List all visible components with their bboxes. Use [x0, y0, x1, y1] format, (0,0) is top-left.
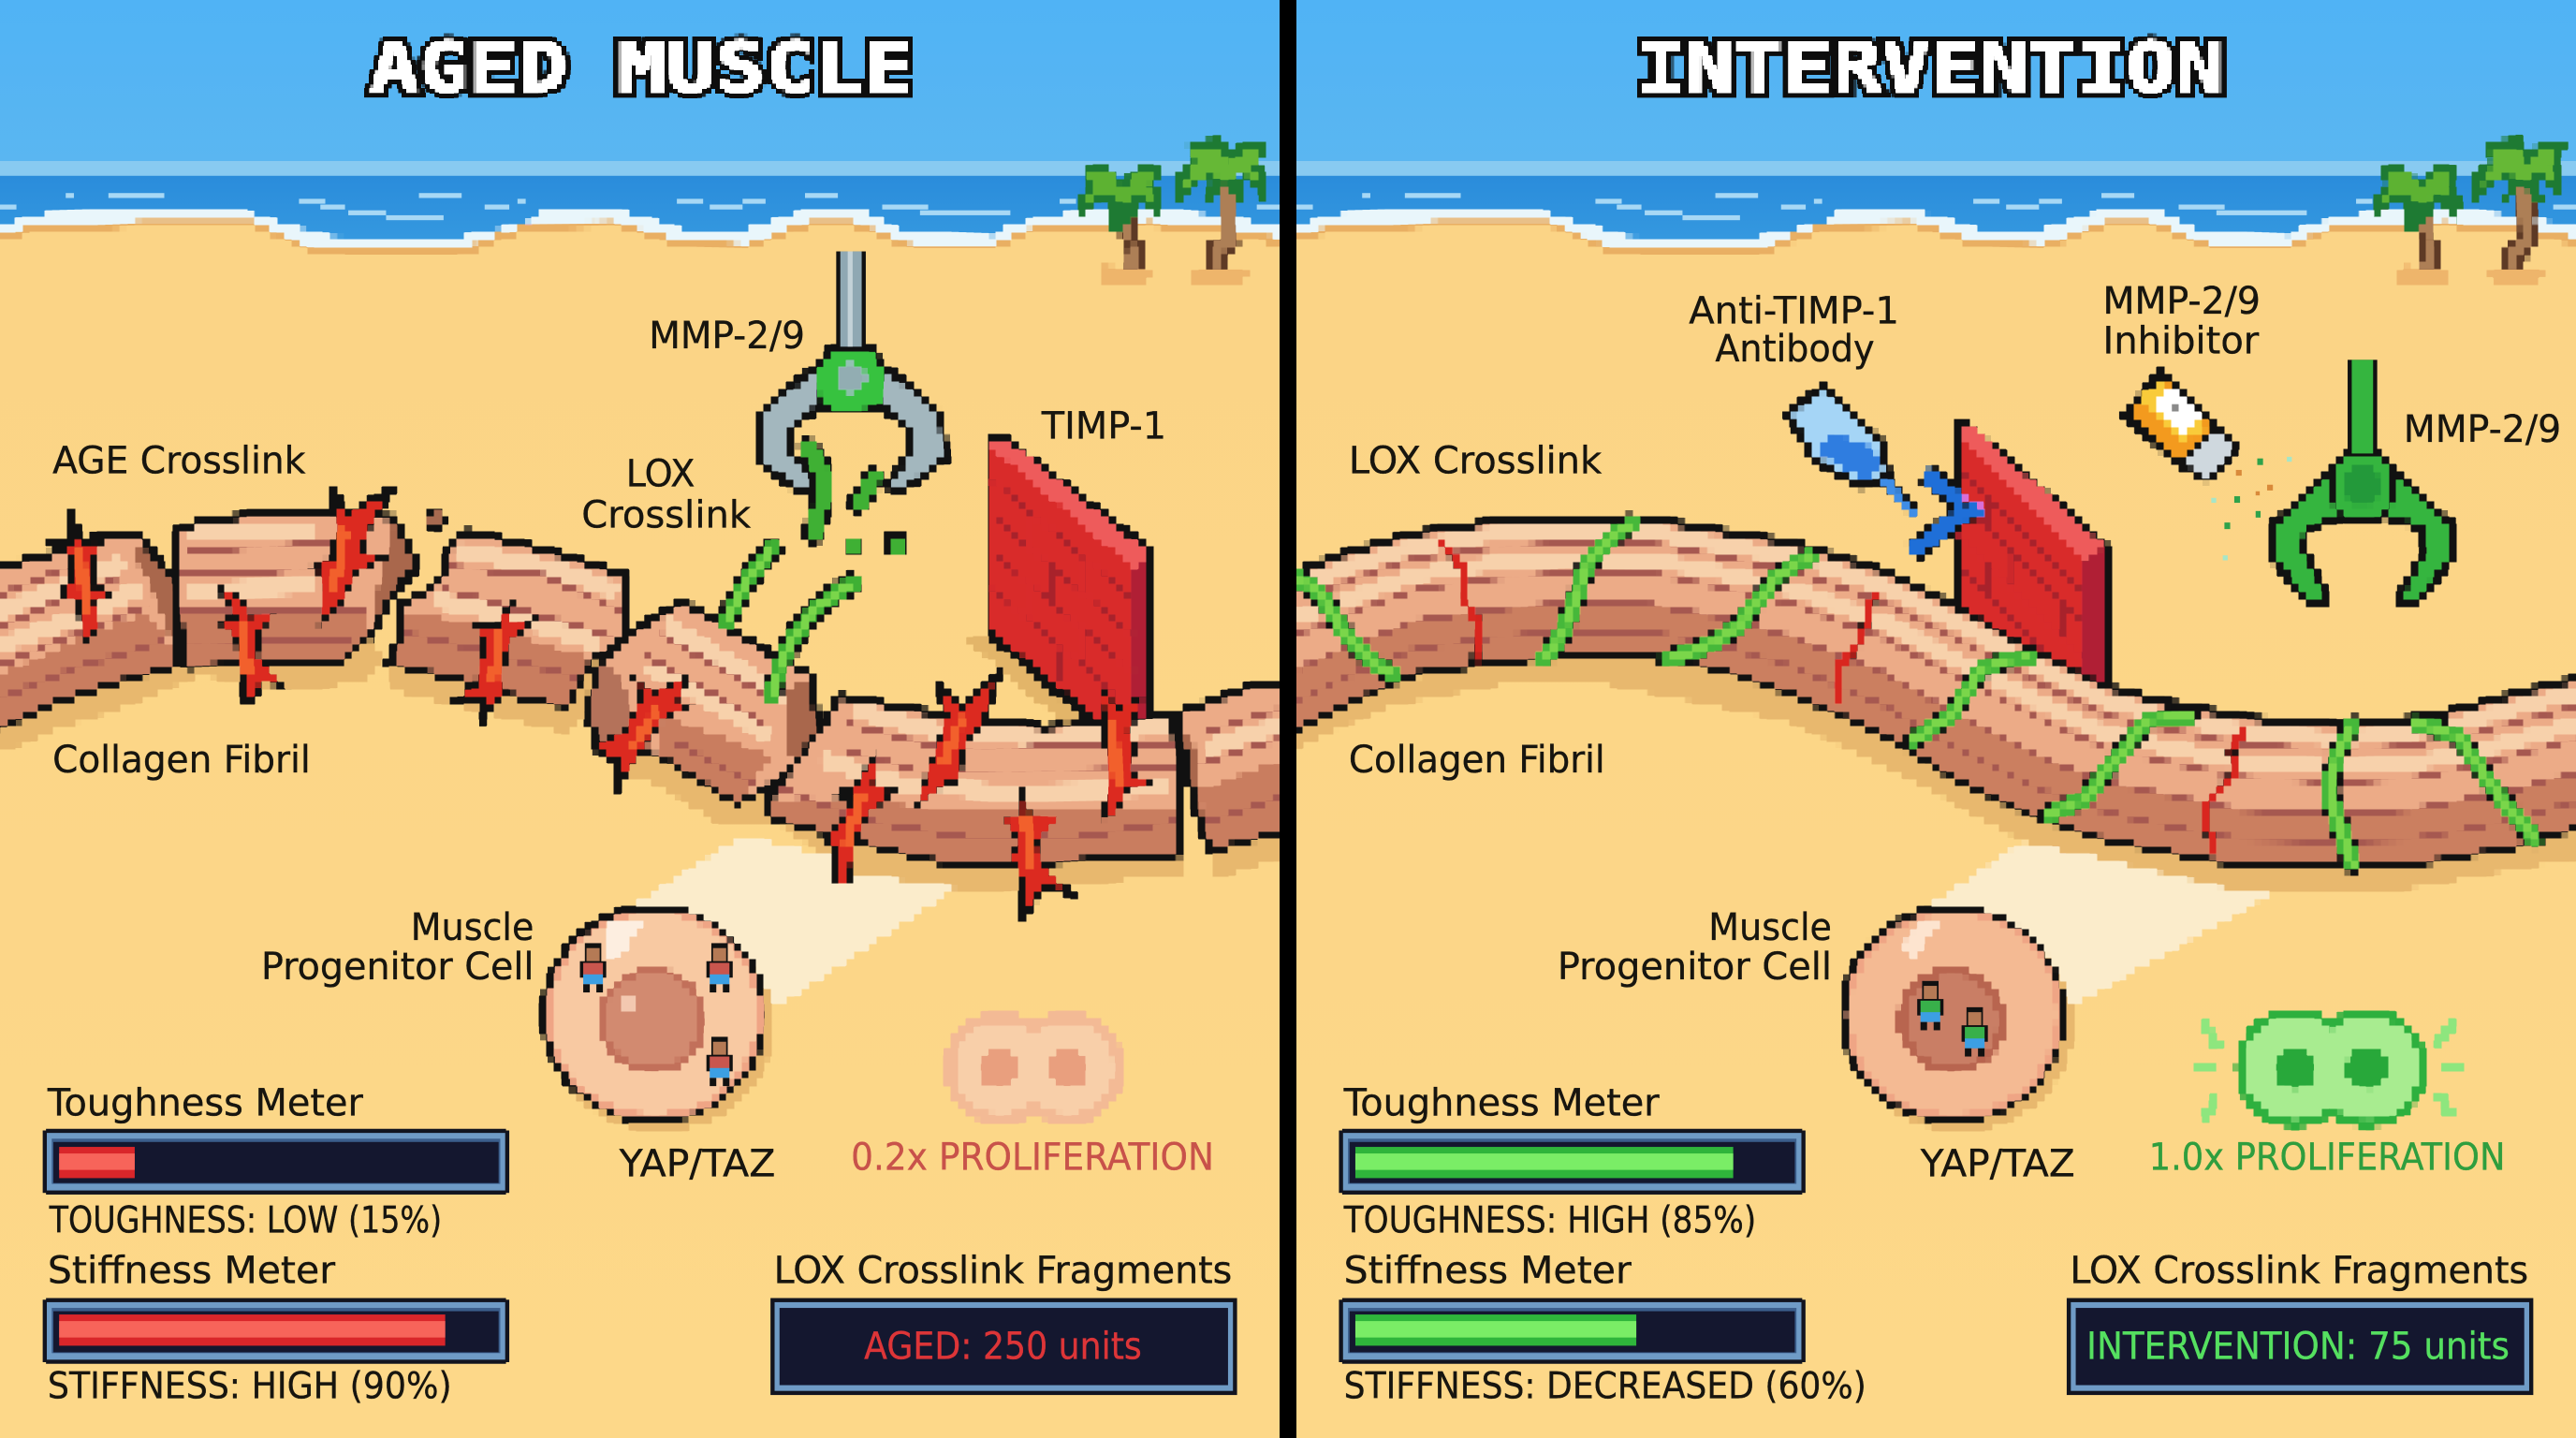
title: AGED MUSCLE — [370, 28, 914, 108]
toughness readout: TOUGHNESS: LOW (15%) — [49, 1198, 442, 1241]
label: progenitor cell: Progenitor Cell — [1558, 945, 1832, 989]
LOX fragments readout box: INTERVENTION: 75 units — [2086, 1324, 2510, 1368]
labels and readouts — [1339, 279, 2561, 1408]
YAP/TAZ figures at cell edge — [580, 943, 733, 1086]
MMP-2/9 green claw rod — [2348, 360, 2378, 453]
label: Crosslink: Crosslink — [581, 492, 752, 536]
minor AGE cracks — [1439, 540, 2246, 855]
labels and readouts — [43, 314, 1237, 1408]
label: TIMP-1: TIMP-1 — [1041, 404, 1166, 448]
LOX crosslinks wrapped around fibril — [1298, 524, 2535, 864]
label: YAP/TAZ: YAP/TAZ — [619, 1142, 775, 1186]
MMP-2/9 claw rod — [836, 252, 866, 346]
stiffness meter heading: Stiffness Meter — [48, 1249, 335, 1293]
proliferating daughter cells — [2197, 1009, 2461, 1127]
label: muscle: Muscle — [1708, 905, 1832, 949]
inhibitor particles — [2211, 457, 2291, 560]
collagen fibril fragment 3 — [389, 533, 627, 707]
sky, sea and sand backdrop — [0, 0, 1280, 1438]
label: AGE crosslink: AGE Crosslink — [52, 438, 306, 482]
mechanical light beam — [1928, 843, 2274, 1007]
label: MMP-2/9: MMP-2/9 — [2103, 279, 2261, 323]
stiffness meter bar — [43, 1299, 509, 1364]
muscle progenitor cell — [1843, 908, 2073, 1131]
LOX fragments readout box — [2067, 1299, 2533, 1395]
inactive green MMP-2/9 claw — [2271, 453, 2454, 605]
shoreline and palm trees — [0, 138, 1280, 287]
fibril shadow on sand — [0, 638, 1278, 890]
sky, sea and sand backdrop — [1296, 0, 2576, 1438]
label: Anti-TIMP-1: Anti-TIMP-1 — [1689, 289, 1899, 333]
toughness meter heading: Toughness Meter — [47, 1081, 363, 1125]
label: progenitor cell: Progenitor Cell — [261, 945, 534, 989]
illustration: beach, fibril, claw and cells — [0, 138, 1290, 1131]
TIMP-1 brick wall — [970, 433, 1153, 729]
illustration: beach, fibril, drugs and cells — [1290, 138, 2576, 1131]
label: MMP-2/9: MMP-2/9 — [649, 314, 805, 358]
label: muscle: Muscle — [411, 905, 534, 949]
proliferation readout: 0.2x PROLIFERATION — [851, 1136, 1214, 1180]
MMP-2/9 claw — [759, 348, 944, 493]
inhibited TIMP-1 wall — [1954, 422, 2110, 690]
AGE crosslinks — [52, 488, 1153, 917]
LOX fragments readout box — [770, 1299, 1237, 1395]
title: INTERVENTION — [1636, 28, 2224, 108]
faded daughter cells — [944, 1012, 1123, 1123]
LOX fragments readout box: AGED: 250 units — [864, 1324, 1142, 1368]
label: collagen fibril: Collagen Fibril — [52, 738, 311, 782]
proliferation readout: 1.0x PROLIFERATION — [2149, 1136, 2506, 1180]
intact collagen fibril — [1290, 520, 2576, 866]
debris fragment — [427, 511, 444, 527]
shoreline and palm trees — [1297, 138, 2576, 287]
label: LOX crosslink: LOX Crosslink — [1349, 438, 1603, 482]
collagen fibril fragment 1 — [0, 536, 179, 733]
collagen fibril fragment 2 — [174, 516, 417, 668]
collagen fibril fragment 6 — [1177, 683, 1290, 851]
LOX fragments heading: LOX Crosslink Fragments — [2070, 1249, 2528, 1293]
toughness meter bar — [43, 1129, 509, 1195]
anti-TIMP-1 antibody bottle — [1789, 388, 1982, 552]
divider — [1280, 0, 1296, 1438]
toughness meter bar — [1339, 1129, 1806, 1195]
panel: aged muscle — [0, 0, 1290, 1438]
stiffness readout: STIFFNESS: HIGH (90%) — [48, 1365, 452, 1408]
label: Inhibitor: Inhibitor — [2103, 318, 2260, 362]
fibril shadow on sand — [1298, 655, 2576, 889]
collagen fibril fragment 5 — [768, 697, 1181, 868]
label: MMP-2/9 claw: MMP-2/9 — [2404, 407, 2561, 451]
stiffness meter bar — [1339, 1299, 1806, 1364]
stiffness meter heading: Stiffness Meter — [1344, 1249, 1632, 1293]
label: collagen fibril: Collagen Fibril — [1349, 738, 1605, 782]
collagen fibril fragment 4 — [585, 603, 818, 803]
muscle progenitor cell — [545, 908, 774, 1131]
MMP-2/9 inhibitor bottle — [2126, 373, 2237, 479]
toughness meter heading: Toughness Meter — [1343, 1081, 1660, 1125]
LOX fragments heading: LOX Crosslink Fragments — [774, 1249, 1232, 1293]
mechanical light beam — [633, 836, 956, 1004]
detached LOX crosslinks — [726, 448, 903, 697]
label: Antibody: Antibody — [1715, 327, 1875, 371]
YAP/TAZ figures inside nucleus — [1917, 981, 1988, 1057]
label: YAP/TAZ: YAP/TAZ — [1920, 1142, 2075, 1186]
stiffness readout: STIFFNESS: DECREASED (60%) — [1344, 1365, 1866, 1408]
label: LOX: LOX — [626, 452, 695, 496]
panel: intervention — [1290, 0, 2576, 1438]
toughness readout: TOUGHNESS: HIGH (85%) — [1343, 1198, 1756, 1241]
